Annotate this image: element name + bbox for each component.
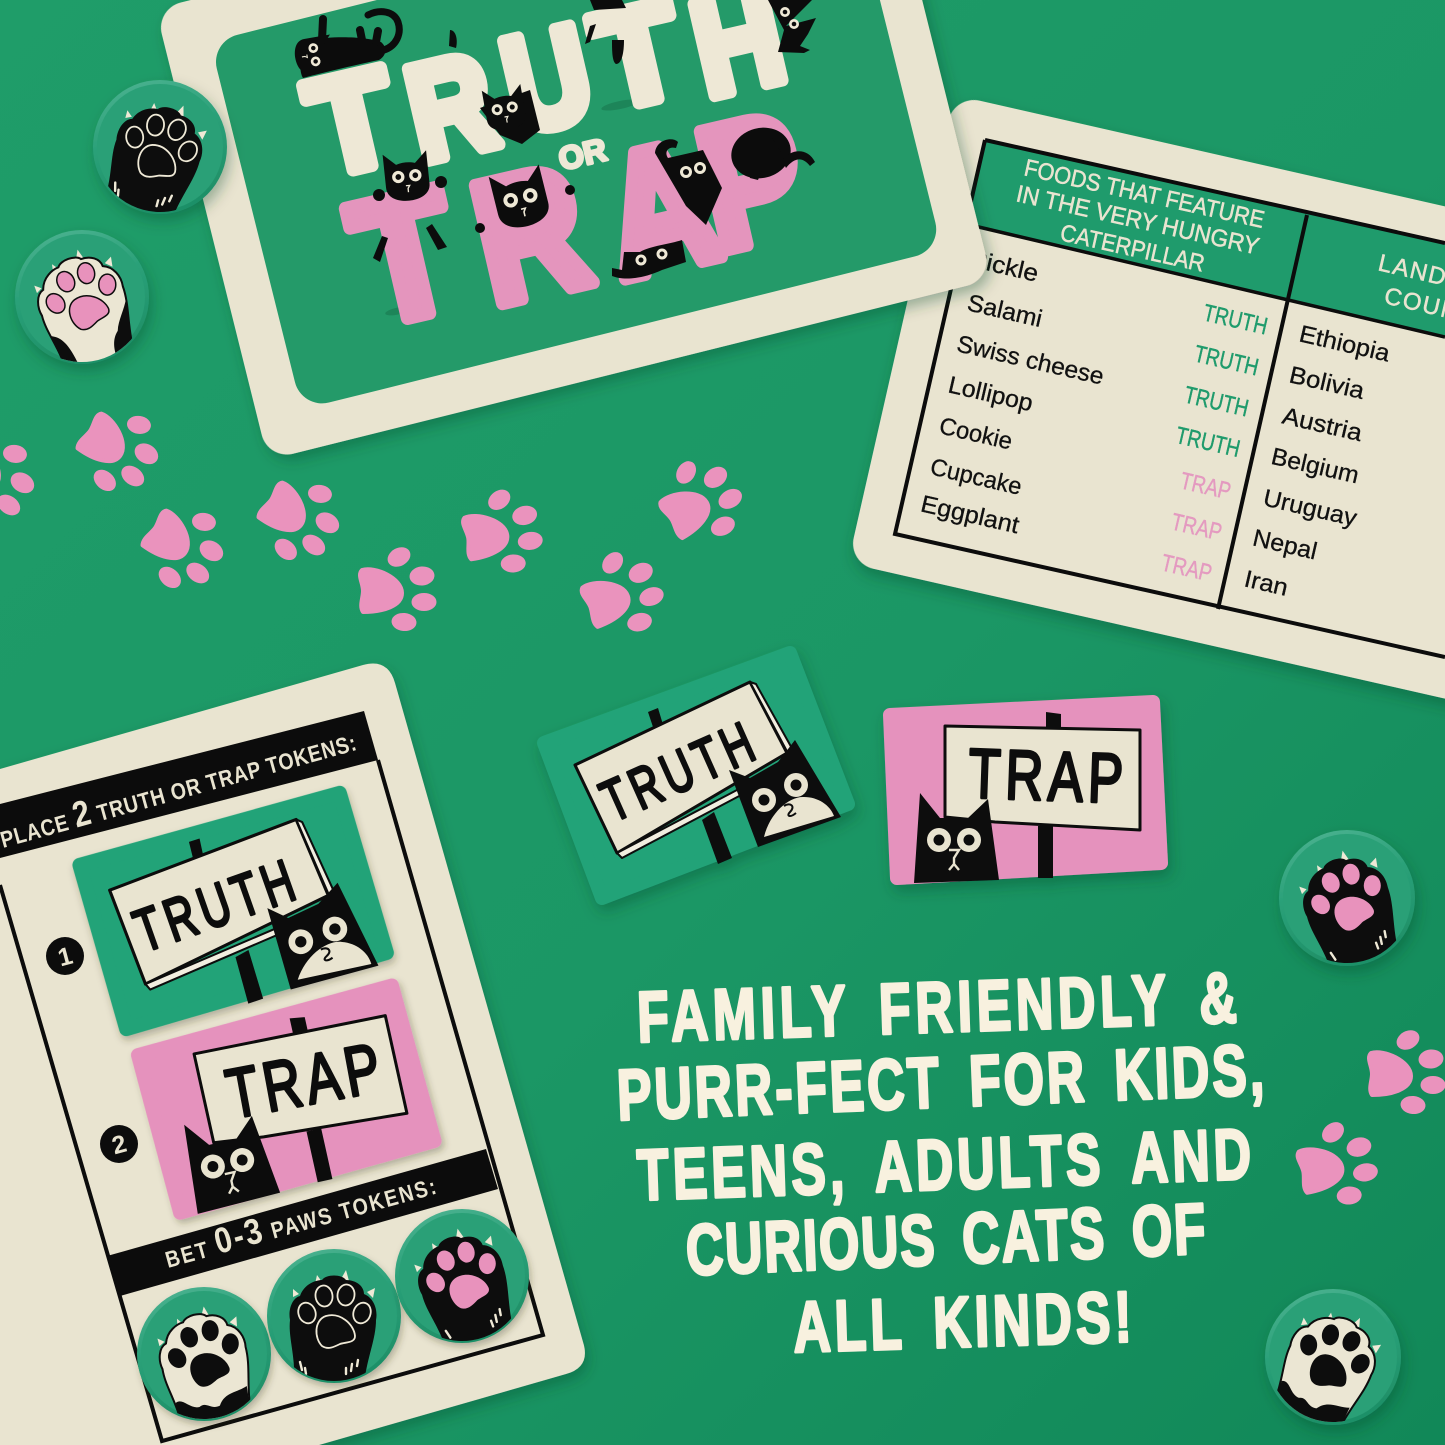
cover green field bbox=[210, 0, 942, 409]
food list: Salami bbox=[965, 290, 1045, 333]
letter shadows bbox=[385, 97, 639, 317]
cat behind R and U bbox=[449, 30, 540, 144]
answers: trap bbox=[1159, 468, 1233, 587]
tagline bbox=[615, 958, 1265, 1368]
card base bbox=[848, 95, 1445, 740]
title: or: OR bbox=[555, 131, 610, 177]
cat above T bbox=[373, 150, 447, 262]
title: trap: P bbox=[682, 76, 822, 288]
token: black paw outline bbox=[93, 80, 227, 226]
title: truth: R bbox=[393, 24, 509, 191]
frame lines bbox=[0, 760, 543, 1441]
title: truth: U bbox=[489, 0, 605, 163]
token on card: pink paw bbox=[395, 1209, 529, 1357]
tagline: TEENS, ADULTS AND bbox=[636, 1114, 1252, 1216]
country list bbox=[1242, 321, 1393, 602]
food list: Lollipop bbox=[946, 372, 1036, 417]
cat under A bbox=[612, 240, 686, 278]
panel: instructions card bbox=[0, 663, 585, 1445]
band heading: BET 0-3 PAWS TOKENS: bbox=[160, 1163, 440, 1276]
token on card: black paw bbox=[267, 1249, 401, 1386]
band: place tokens bbox=[0, 711, 378, 858]
food list: Swiss cheese bbox=[954, 331, 1106, 391]
token: white paw bottom right bbox=[1265, 1289, 1401, 1437]
number 1: 1 bbox=[55, 942, 76, 972]
token: truth: TRUTH bbox=[591, 710, 764, 834]
answers: truth: TRUTH bbox=[1182, 382, 1251, 422]
answers: truth: TRUTH bbox=[1173, 422, 1243, 463]
token on card: trap: TRAP bbox=[220, 1029, 387, 1134]
title: trap: T bbox=[335, 150, 475, 363]
cat on P bbox=[726, 121, 815, 185]
title: trap: R bbox=[457, 128, 605, 342]
country list: Iran bbox=[1242, 566, 1291, 602]
token: white pink paw bbox=[15, 230, 149, 378]
food list: Cookie bbox=[937, 413, 1015, 455]
panel: game box cover bbox=[156, 0, 992, 460]
answers: trap: TRAP bbox=[1178, 468, 1233, 505]
table header bbox=[966, 140, 1445, 337]
token on card: truth bbox=[67, 773, 399, 1049]
number 2: 2 bbox=[109, 1130, 130, 1160]
cat between A and P bbox=[655, 139, 722, 225]
food list bbox=[918, 246, 1106, 539]
token: pink paw right bbox=[1279, 830, 1415, 979]
cover card base bbox=[156, 0, 992, 460]
token: trap bbox=[890, 702, 1161, 883]
cat top behind T bbox=[585, 0, 626, 64]
token: trap: TRAP bbox=[967, 735, 1124, 819]
country list: Belgium bbox=[1269, 443, 1361, 489]
country list: Nepal bbox=[1250, 525, 1320, 565]
answers: truth: TRUTH bbox=[1192, 341, 1261, 381]
column heading: foods: CATERPILLAR bbox=[1058, 219, 1207, 278]
country list: Ethiopia bbox=[1297, 321, 1393, 368]
cat upper right of H bbox=[768, 0, 816, 53]
country list: Bolivia bbox=[1287, 362, 1367, 405]
token on card: truth: TRUTH bbox=[125, 847, 303, 965]
token on card: white paw bbox=[137, 1287, 271, 1433]
tagline: CURIOUS CATS OF bbox=[684, 1189, 1207, 1291]
table lines bbox=[895, 140, 1445, 657]
country list: Uruguay bbox=[1261, 485, 1359, 532]
title: trap bbox=[335, 76, 822, 363]
title: truth: T bbox=[294, 39, 410, 205]
number 2 bbox=[100, 1125, 138, 1163]
band heading: PLACE 2 TRUTH OR TRAP TOKENS: bbox=[0, 720, 360, 856]
title: truth bbox=[294, 0, 797, 205]
panel: answer card bbox=[848, 95, 1445, 740]
paw print trail bbox=[0, 391, 1445, 1213]
tagline: PURR-FECT FOR KIDS, bbox=[615, 1030, 1265, 1136]
column heading: foods bbox=[1014, 154, 1267, 278]
food list: Eggplant bbox=[918, 491, 1022, 539]
number 1 bbox=[46, 937, 84, 975]
answers: truth: TRUTH bbox=[1201, 300, 1270, 340]
token: truth bbox=[544, 653, 848, 898]
tagline: ALL KINDS! bbox=[792, 1277, 1133, 1368]
food list: Cupcake bbox=[928, 454, 1024, 501]
cat on R bbox=[475, 164, 575, 233]
band: bet paws bbox=[107, 1149, 498, 1296]
food list: Pickle bbox=[967, 246, 1041, 288]
card base bbox=[0, 663, 585, 1445]
country list: Austria bbox=[1280, 403, 1365, 447]
token on card: trap bbox=[135, 984, 439, 1219]
answers: trap: TRAP bbox=[1169, 509, 1224, 546]
column heading: foods: FOODS THAT FEATURE bbox=[1022, 154, 1267, 234]
answers: truth bbox=[1173, 300, 1270, 463]
tagline: FAMILY FRIENDLY & bbox=[636, 958, 1238, 1058]
column heading: foods: IN THE VERY HUNGRY bbox=[1014, 180, 1262, 261]
title: trap: A bbox=[586, 102, 734, 316]
answers: trap: TRAP bbox=[1159, 550, 1214, 587]
cat lying on T bbox=[292, 12, 399, 78]
